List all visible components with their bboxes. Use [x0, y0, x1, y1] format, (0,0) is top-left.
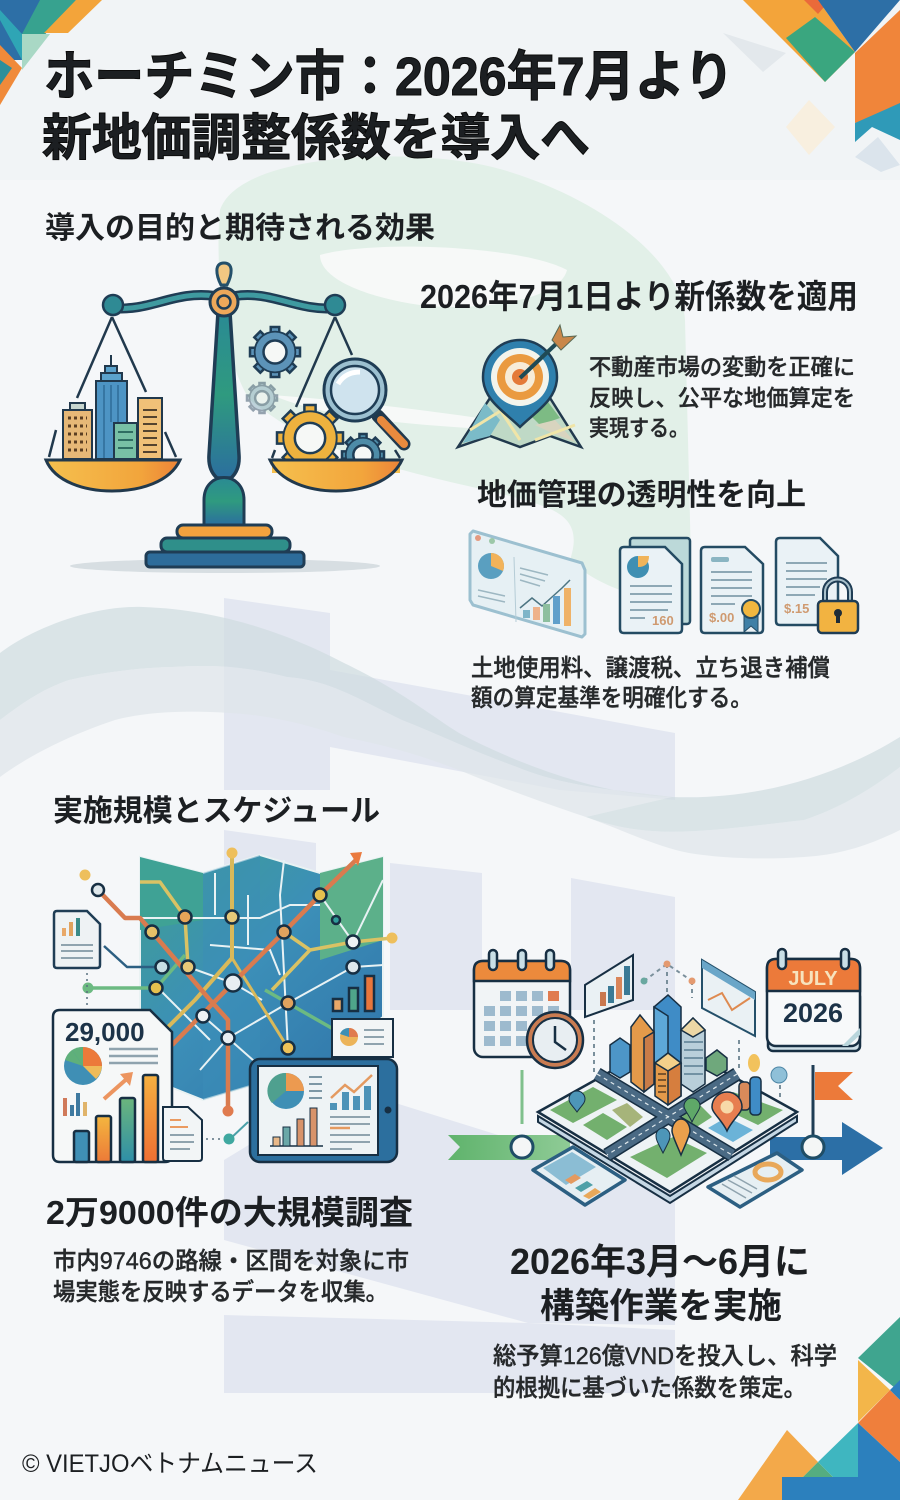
folded map	[140, 855, 383, 1100]
beam	[112, 295, 335, 308]
pole	[209, 312, 239, 478]
July 2026 calendar	[768, 992, 860, 1051]
small report top left	[54, 911, 100, 968]
left pan	[46, 460, 180, 491]
left calendar	[474, 961, 570, 1057]
text block: accurate market: 実現する。	[589, 416, 689, 441]
green lots	[550, 1087, 617, 1123]
text block: transparency detail: 土地使用料、譲渡税、立ち退き補償	[471, 655, 830, 682]
cylinders	[739, 1082, 750, 1110]
illustration: survey route map	[53, 848, 398, 1162]
small note	[163, 1106, 202, 1161]
left buildings	[63, 355, 162, 459]
icon: certificate document: $.00	[709, 610, 734, 625]
text block: accurate market: 反映し、公平な地価算定を	[589, 386, 855, 411]
faint green swirl	[219, 156, 692, 601]
nodes	[80, 848, 398, 1116]
flag	[812, 1065, 814, 1140]
isometric buildings	[610, 995, 727, 1105]
text block: construction period: 総予算126億VNDを投入し、科学	[493, 1343, 837, 1370]
text block: transparency detail: 額の算定基準を明確化する。	[471, 685, 752, 712]
illustration: smart city timeline: JULY	[788, 968, 838, 990]
title: ホーチミン市：2026年7月より	[44, 47, 734, 107]
wave bands	[0, 607, 672, 797]
text block: large survey: 市内9746の路線・区間を対象に市	[53, 1248, 409, 1275]
icon: dashboard screen	[470, 531, 585, 637]
blue timeline arrow	[770, 1122, 883, 1175]
timeline markers	[511, 1136, 533, 1158]
text block: accurate market: 不動産市場の変動を正確に	[589, 355, 855, 380]
heading: scale and schedule: 実施規模とスケジュール	[53, 795, 380, 828]
icon: locked document: $.15	[784, 601, 809, 616]
corner decoration: bottom right	[738, 1317, 900, 1500]
roads	[597, 1074, 737, 1155]
heading: apply new coefficient: 2026年7月1日より新係数を適用	[420, 278, 858, 315]
title	[42, 47, 734, 166]
top knob	[217, 263, 231, 285]
icon: report document: 160	[652, 613, 674, 628]
icon: target pin on map	[458, 325, 581, 447]
lavender building shapes	[224, 598, 675, 1393]
credit: © VIETJOベトナムニュース	[22, 1450, 318, 1478]
text block: construction period: 2026年3月～6月に	[510, 1241, 810, 1282]
tablet	[250, 1059, 397, 1162]
strings	[49, 317, 400, 458]
corner decoration: top right	[723, 0, 900, 172]
small chart card	[332, 1019, 393, 1057]
bulb and base	[204, 478, 244, 525]
dotted connectors	[594, 964, 780, 1098]
isometric platform	[538, 1116, 797, 1203]
connector	[206, 1138, 224, 1140]
text block: large survey: 場実態を反映するデータを収集。	[53, 1278, 388, 1306]
title: 新地価調整係数を導入へ	[42, 110, 590, 166]
shadow	[70, 559, 380, 573]
icon: certificate document	[701, 547, 763, 633]
map pins	[712, 1092, 742, 1131]
large report: 29,000	[53, 1010, 172, 1162]
floating charts	[585, 955, 633, 1017]
floating coins	[748, 1054, 760, 1072]
text block: construction period	[493, 1241, 837, 1402]
heading: purpose and effects: 導入の目的と期待される効果	[45, 212, 435, 245]
illustration: survey route map: 29,000	[65, 1017, 145, 1047]
faded gear	[247, 383, 277, 413]
illustration: smart city timeline: 2026	[783, 998, 843, 1028]
right pan	[270, 460, 402, 491]
illustration: balance scale	[46, 263, 404, 573]
text block: large survey	[46, 1194, 413, 1306]
white streets	[140, 860, 383, 1075]
text block: construction period: 的根拠に基づいた係数を策定。	[493, 1375, 806, 1402]
text block: accurate market	[589, 355, 855, 441]
heading: transparency: 地価管理の透明性を向上	[477, 479, 806, 512]
text block: transparency detail	[471, 655, 830, 712]
device with donut	[708, 1153, 802, 1207]
blue gear	[250, 327, 300, 377]
icon: locked document	[776, 538, 858, 633]
phone	[533, 1147, 625, 1205]
clock	[527, 1012, 583, 1068]
text block: construction period: 構築作業を実施	[540, 1287, 782, 1326]
magnifier	[378, 416, 404, 444]
gold and small gears	[277, 405, 343, 471]
text block: large survey: 2万9000件の大規模調査	[46, 1194, 413, 1231]
icon: report document	[620, 538, 690, 633]
bar chart on map	[333, 976, 374, 1011]
green timeline banner	[448, 1135, 570, 1160]
corner decoration: top left	[0, 0, 102, 105]
colored routes	[88, 853, 392, 1111]
illustration: smart city timeline	[448, 949, 883, 1207]
